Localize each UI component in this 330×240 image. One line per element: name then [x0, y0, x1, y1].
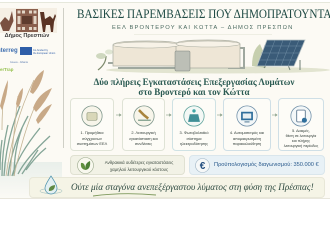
step 5: [278, 98, 324, 151]
subtitle: ΕΕΛ ΒΡΟΝΤΕΡΟΥ ΚΑΙ ΚΩΤΤΑ – ΔΗΜΟΣ ΠΡΕΣΠΩΝ: [112, 25, 293, 31]
text: EU co-funding: Co-funded by: [33, 48, 48, 52]
text: EU co-funding: [33, 48, 56, 54]
text: step 5 label: και πλήρης: [292, 139, 310, 143]
text: benefit label: χαμηλού λειτουργικού κόστους: [110, 167, 168, 172]
budget box: [189, 155, 325, 175]
icon: tank: [82, 106, 102, 126]
benefit: lower costs: [70, 155, 185, 175]
text: benefit label: [104, 160, 174, 172]
olive tree: [96, 50, 113, 70]
logo text: municipality name: Δήμος Πρεσπών: [5, 33, 49, 39]
text: step 5 label: 5. Δοκιμές,: [292, 129, 310, 133]
icon: water drop: [40, 176, 62, 194]
closing banner: [29, 177, 325, 198]
arrow: [166, 114, 172, 116]
text: step 2 label: [129, 130, 158, 146]
text: step 5 label: [284, 129, 318, 148]
text: step 4 label: [230, 130, 264, 146]
icon: wrench: [134, 106, 154, 126]
logo: Dimos Prespon emblem: [0, 8, 57, 33]
text: budget: Προϋπολογισμός διαγωνισμού: 350.000 €: [214, 162, 319, 168]
heading: στο Βροντερό και τον Κώττα: [138, 87, 250, 97]
icon: solar: [184, 106, 204, 126]
text: step 2 label: εγκατάσταση και: [129, 136, 158, 140]
text: step 2 label: συνδέσεις: [135, 141, 152, 146]
text: step 5 label: θέση σε λειτουργία: [286, 134, 316, 138]
logo: EU flag: [20, 47, 32, 55]
text: step 1 label: [76, 130, 108, 146]
text: EU co-funding: the European Union: [33, 52, 55, 54]
divider: [63, 8, 64, 148]
text: step 4 label: 4. Αυτοματισμός και: [230, 130, 264, 135]
illustration: tanks and solar panel: [96, 34, 330, 74]
arrow: [116, 114, 122, 116]
text: step 5 label: λειτουργική περίοδος: [284, 144, 318, 148]
text: step 2 label: 2. Λειτουργική: [131, 130, 156, 135]
icon: euro: €: [200, 161, 206, 172]
icon: clipboard: [290, 106, 312, 126]
text: step 3 label: ηλεκτροδότησης: [180, 141, 208, 146]
text: step 3 label: σύστημα: [186, 136, 202, 140]
text: benefit label: Ανθρακικά ουδέτερες εγκαταστάσεις: [105, 160, 173, 165]
heading: [94, 77, 294, 97]
text: step 3 label: 3. Φωτοβολταϊκό: [180, 130, 208, 135]
step 4: [223, 98, 271, 151]
decoration: underline swoosh: [93, 193, 156, 196]
text: step 4 label: παρακολούθηση: [233, 141, 261, 146]
arrow: [272, 114, 278, 116]
text: project name: erTrap: [0, 67, 13, 72]
icon: monitor: [236, 106, 258, 126]
text: step 3 label: [180, 130, 208, 146]
step 1: [70, 98, 114, 151]
icon: leaf: [77, 157, 94, 174]
illustration: reeds and water: [0, 70, 62, 184]
text: step 1 label: 1. Προμήθεια: [81, 130, 103, 135]
pipes: [108, 48, 244, 68]
text: step 1 label: συστημάτων ΕΕΛ: [77, 141, 107, 146]
icon: euro: [195, 158, 210, 173]
text: step 4 label: απομακρυσμένη: [233, 136, 261, 140]
arrow: [217, 114, 222, 116]
heading: Δύο πλήρεις Εγκαταστάσεις Επεξεργασίας Λυμάτων: [94, 77, 294, 87]
text: step 1 label: σύγχρονων: [82, 136, 102, 140]
text: programme area: Greece - Albania: [10, 61, 28, 64]
title: ΒΑΣΙΚΕΣ ΠΑΡΕΜΒΑΣΕΙΣ ΠΟΥ ΔΗΜΟΠΡΑΤΟΥΝΤΑΙ: [77, 7, 330, 21]
step 2: [122, 98, 165, 151]
sidebar: logos: [0, 8, 57, 72]
step 3: [172, 98, 216, 151]
text: closing slogan: Ούτε μία σταγόνα ανεπεξέργαστου λύματος στη φύση της Πρέσπας!: [71, 182, 314, 192]
